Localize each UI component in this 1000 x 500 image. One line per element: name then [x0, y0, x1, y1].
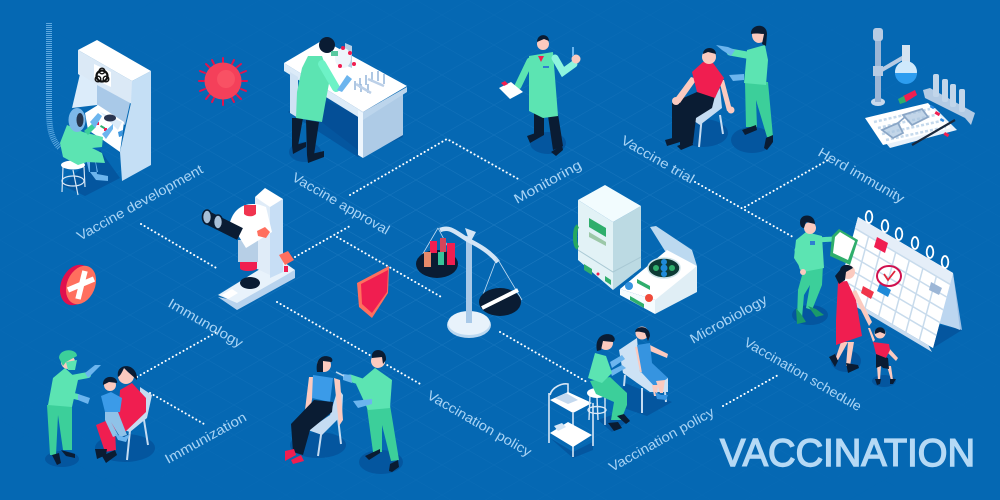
- nurse: [745, 82, 773, 137]
- illustration: incubator and centrifuge: [575, 185, 697, 314]
- glasses: [882, 109, 928, 138]
- child: [868, 328, 898, 380]
- illustration: nurse treating patient with cart: [549, 326, 672, 458]
- calendar page: [838, 217, 953, 352]
- biohazard sign: [94, 64, 111, 87]
- illustration: balance scale: [416, 228, 522, 338]
- scientist: [289, 142, 321, 162]
- label: Vaccine development: Vaccine development: [74, 162, 206, 244]
- cart: [549, 384, 593, 457]
- calendar rings: [866, 211, 948, 268]
- patient chair: [624, 375, 666, 413]
- illustration: lab bench with scientist: [284, 37, 407, 163]
- chair: [682, 113, 723, 147]
- child: [105, 410, 127, 437]
- label: Herd immunity: Herd immunity: [816, 145, 907, 206]
- eraser: [903, 90, 917, 102]
- bench microscope: [345, 43, 352, 68]
- rack: [923, 88, 975, 125]
- stand: [871, 98, 885, 106]
- test tube rows: [355, 71, 384, 93]
- nurse with clipboard: [797, 264, 823, 318]
- label: Microbiology: Microbiology: [687, 292, 770, 347]
- icon: shield: [357, 266, 389, 318]
- stool: [588, 395, 606, 425]
- woman: [835, 342, 854, 366]
- illustration: doctor vaccinating seated woman: [285, 350, 403, 474]
- chair: [318, 418, 341, 456]
- label: Immunization: Immunization: [162, 409, 249, 467]
- stool: [62, 167, 85, 195]
- chair: [127, 420, 148, 460]
- label: Vaccine approval: Vaccine approval: [290, 170, 392, 238]
- label: Immunology: Immunology: [166, 296, 246, 351]
- dotted connector lines: [137, 139, 828, 424]
- patient: [305, 377, 343, 426]
- papers: [872, 108, 957, 148]
- label: Vaccine trial: Vaccine trial: [618, 133, 697, 187]
- illustration: microscope: [202, 188, 295, 310]
- illustration: scientist monitoring: [499, 35, 580, 156]
- mother: [96, 410, 137, 452]
- label: Vaccination policy (centre): Vaccination policy: [424, 388, 534, 460]
- doctor: [367, 405, 399, 461]
- calendar stand: [920, 325, 962, 348]
- icon: virus: [199, 58, 247, 105]
- nurse: [47, 405, 72, 455]
- worker: [86, 158, 108, 181]
- label: Vaccination schedule: Vaccination schedule: [742, 335, 864, 414]
- illustration: vaccine trial: [665, 26, 773, 153]
- patient: [635, 345, 668, 372]
- centrifuge: [650, 226, 697, 266]
- illustration: vaccination schedule calendar with nurse and family: [792, 211, 962, 387]
- title: VACCINATION: [720, 432, 975, 475]
- icon: medical cross badge: [54, 260, 102, 310]
- patient: [672, 92, 715, 145]
- illustration: flask, test tubes and papers: [865, 28, 975, 148]
- illustration: biosafety cabinet with worker: [49, 23, 151, 196]
- label: Monitoring: Monitoring: [511, 157, 584, 207]
- hose: [49, 23, 60, 148]
- nurse: [590, 377, 627, 420]
- label: Vaccination policy (right): Vaccination policy: [606, 404, 717, 475]
- illustration: immunization nurse, mother and child: [45, 350, 155, 467]
